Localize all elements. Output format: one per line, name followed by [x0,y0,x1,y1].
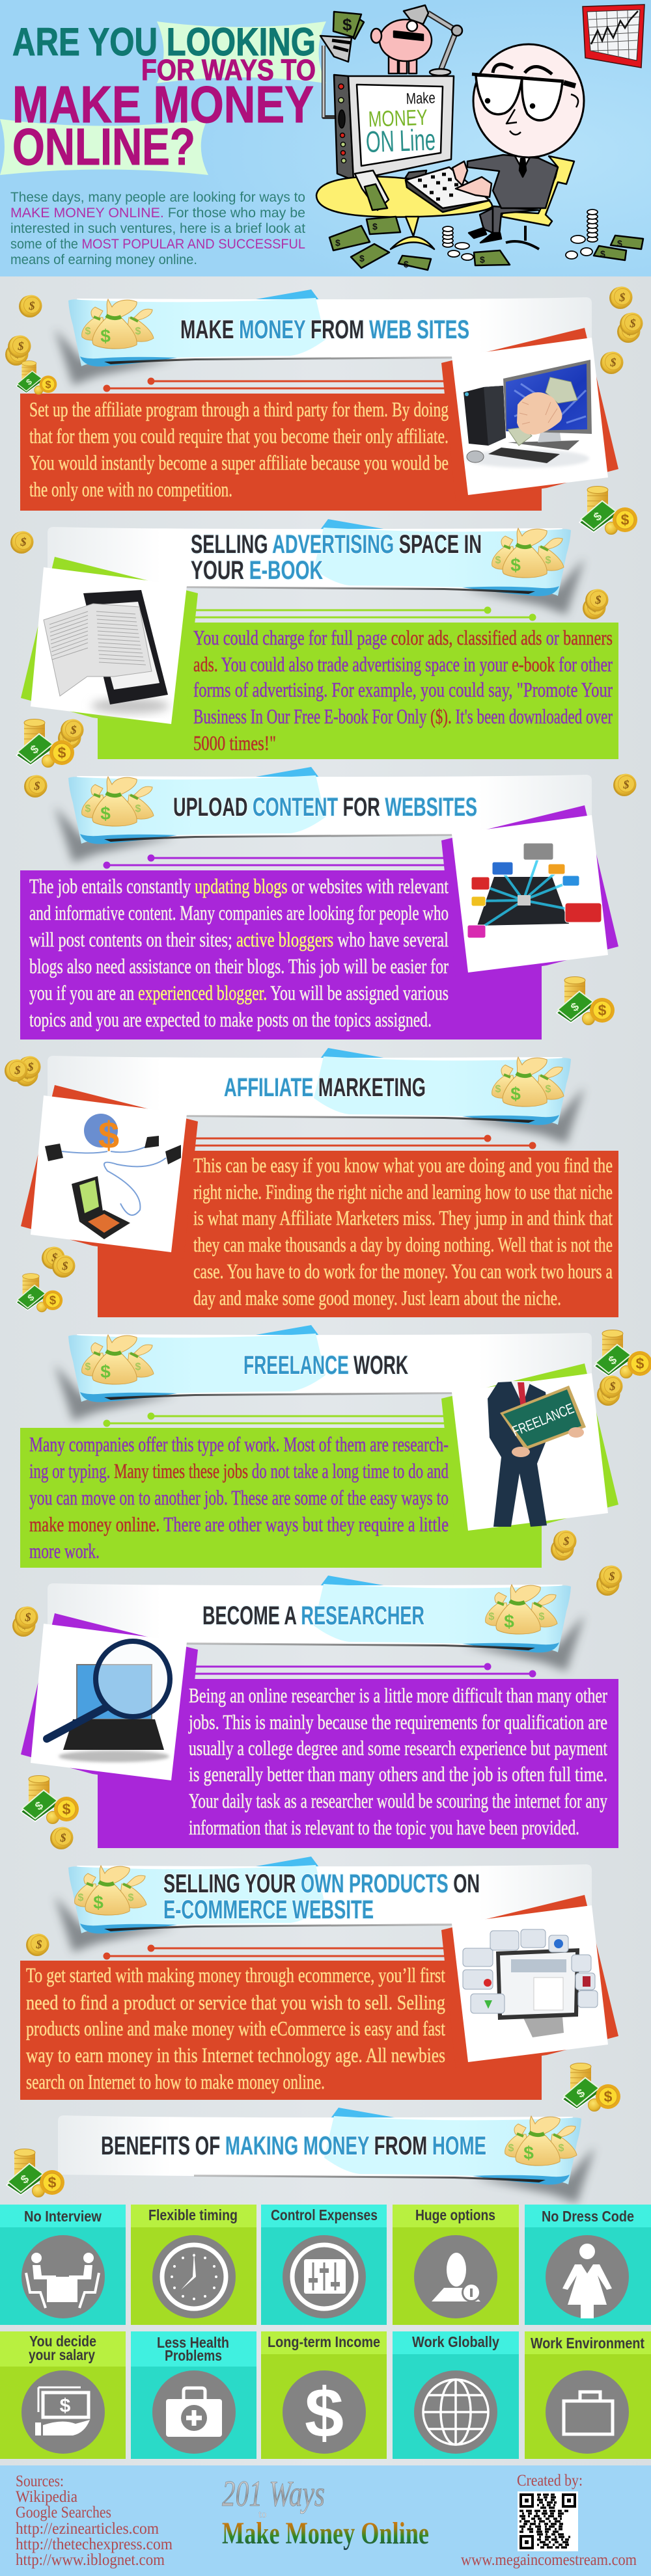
connector lines [104,378,449,392]
money bags [492,528,564,578]
body text: You would instantly become a super affiliate because you would be [29,451,449,474]
ribbon [48,519,585,615]
body text [188,1684,607,1839]
body text: To get started with making money through ecommerce, you’ll first [26,1963,445,1987]
card: control expenses [261,2205,387,2325]
illustration: piggy bank and lamp arm [371,5,462,75]
text panel [20,870,542,1040]
money bags [75,1866,146,1915]
illustration: scattered cash and coins: $ [617,238,622,248]
back card [441,328,618,501]
title [12,20,316,176]
section 1: make money from web sites [20,289,618,511]
intro paragraph: These days, many people are looking for ways to [10,190,305,205]
card: no interview [0,2205,126,2325]
image card: computer with fist [452,338,608,495]
text panel [20,1961,542,2100]
back card [21,557,198,731]
illustration: scattered cash and coins: $ [404,259,409,269]
image card: phone and book [31,567,187,724]
intro paragraph: some of the MOST POPULAR AND SUCCESSFUL [10,237,305,252]
image card: tablet with app icons [452,815,608,973]
heading: SELLING YOUR OWN PRODUCTS ON [163,1870,480,1898]
sources: Google Searches [16,2504,111,2521]
sources [16,2473,173,2569]
card: you decide your salary: $ [60,2395,71,2417]
sources: http://ezinearticles.com [16,2520,159,2538]
money bags [82,299,154,349]
section 7: selling your own products [20,1857,618,2100]
heading [191,530,482,585]
image card: man with freelance board: FREELANCE [510,1400,576,1440]
text panel [20,394,542,511]
card: long-term income: $ [305,2373,344,2452]
ribbon [55,289,592,385]
heading: AFFILIATE MARKETING [224,1073,426,1102]
intro paragraph: means of earning money online. [10,252,197,267]
card: you decide your salary [0,2331,126,2459]
body text: and informative content. Many companies are looking for people who [29,901,449,924]
image card: monitor with web icons [452,1905,608,2062]
card: long-term income [261,2331,387,2459]
section 4: affiliate marketing [21,1048,618,1317]
money bags [492,1057,564,1107]
body text: 5000 times!" [193,731,276,755]
money bags [82,777,154,826]
body text: that for them you could require that you become their only affiliate. [29,424,449,448]
201 ways logo: Make Money Online [222,2516,429,2551]
card: no interview: No Interview [24,2208,102,2225]
screen text: Make [406,89,436,108]
intro paragraph [10,190,305,267]
title: ARE YOU LOOKING [12,20,316,64]
card: flexible timing [131,2205,256,2325]
body text: you can move on to another job. These are some of the easy ways to [29,1486,449,1509]
card: huge options [393,2205,519,2325]
body text [193,1153,613,1309]
illustration: scattered cash and coins: $ [335,237,340,248]
sources: http://www.iblognet.com [16,2551,165,2569]
body text [29,874,449,1031]
back card [21,1613,198,1787]
money bags [486,1585,557,1634]
text panel [98,623,618,759]
back card [441,1895,618,2068]
illustration: scattered cash and coins: $ [600,248,605,259]
card: work globally: Work Globally [412,2333,499,2350]
body text: you if you are an experienced blogger. You will be assigned various [29,981,449,1004]
section 8: benefits banner [58,2108,595,2203]
body text [193,626,613,755]
back card [21,1085,198,1259]
body text [29,397,449,501]
card: flexible timing: Flexible timing [148,2207,238,2223]
ribbon [48,1048,585,1144]
ribbon [48,1576,585,1671]
created by: Created by: [517,2472,583,2489]
heading: MAKE MONEY FROM WEB SITES [180,315,469,344]
image card: man with freelance board [452,1373,608,1531]
image card: globe and laptops: $ [98,1114,119,1157]
title: MAKE MONEY [12,75,314,133]
body text: products online and make money with eCommerce is easy and fast [26,2017,445,2040]
section 5: freelance work [20,1325,618,1568]
money bags [505,2116,577,2166]
footer panel [0,2465,651,2576]
highlight shape behind title [0,21,326,175]
body text: Set up the affiliate program through a third party for them. By doing [29,397,449,421]
connector lines [191,607,536,621]
section 6: become a researcher [21,1576,618,1848]
section 3: upload content [20,767,618,1040]
heading: FREELANCE WORK [243,1351,408,1380]
QR code [518,2491,578,2551]
intro paragraph: MAKE MONEY ONLINE. For those who may be [10,206,305,221]
ribbon [55,1325,592,1421]
ribbon [55,1857,592,1952]
card: control expenses: Control Expenses [271,2207,378,2223]
body text: ads. You could also trade advertising space in your e-book for other [193,652,613,676]
text panel [98,1679,618,1848]
card: less health problems [131,2331,256,2459]
card: work environment [525,2331,651,2459]
head [473,44,584,157]
connector lines [191,1663,536,1677]
ribbon [58,2108,595,2203]
illustration: scattered cash and coins [329,209,643,270]
body text: will post contents on their sites; active bloggers who have several [29,928,449,951]
section 2: selling advertising space [21,519,618,759]
back card [441,805,618,978]
screen text: MONEY [368,105,428,132]
sources: Wikipedia [16,2488,77,2506]
body text: make money online. There are other ways but they require a little [29,1512,449,1536]
title: FOR WAYS TO [141,53,316,87]
decorative coins and cash [5,286,651,2197]
heading: BECOME A RESEARCHER [202,1602,424,1630]
card: you decide your salary: your salary [29,2346,95,2363]
connector lines [191,1135,536,1149]
heading: UPLOAD CONTENT FOR WEBSITES [173,793,477,822]
body text: blogs also need assistance on their blogs. This job will be easier for [29,954,449,978]
illustration: desk and keyboard [316,167,492,249]
heading: YOUR E-BOOK [191,556,323,585]
text panel [98,1151,618,1317]
text panel [20,1428,542,1568]
body text: need to find a product or service that you wish to sell. Selling [26,1991,445,2014]
sources: Sources: [16,2473,64,2490]
body text: Many companies offer this type of work. Most of them are research- [29,1432,449,1456]
connector lines [104,1945,449,1959]
body text: topics and you are expected to make posts on the topics assigned. [29,1008,432,1031]
image card: globe and laptops [31,1095,187,1252]
card: long-term income: Long-term Income [268,2333,380,2350]
body text: way to earn money in this Internet technology age. All newbies [26,2043,445,2067]
card: no dress code: No Dress Code [542,2208,634,2225]
body text: You could charge for full page color ads, classified ads or banners [193,626,613,649]
heading: E-COMMERCE WEBSITE [163,1896,374,1924]
screen text: ON Line [365,122,436,159]
body text: ing or typing. Many times these jobs do not take a long time to do and [29,1459,449,1483]
back card [441,1363,618,1536]
money bags [82,1335,154,1384]
card: you decide your salary: You decide [29,2333,96,2350]
illustration: robot arm with cash: $ [342,15,352,34]
sources: http://thetechexpress.com [16,2536,173,2553]
body text: more work. [29,1539,100,1563]
card: no dress code [525,2205,651,2325]
image card: magnifier on laptop [31,1624,187,1780]
body text [26,1963,445,2093]
illustration: scattered cash and coins: $ [372,221,378,232]
header panel [0,0,651,276]
illustration: man in suit [452,44,584,249]
201 ways logo: to [258,2509,266,2520]
title: ONLINE? [12,118,195,176]
benefits grid [0,2205,651,2459]
card: huge options: Huge options [415,2207,495,2223]
body text: search on Internet to how to make money online. [26,2070,325,2093]
illustration: scattered cash and coins: $ [480,254,485,265]
illustration: robot arm with cash [320,12,364,117]
card: work globally [393,2331,519,2459]
body text: the only one with no competition. [29,477,232,501]
heading: SELLING ADVERTISING SPACE IN [191,530,482,559]
intro paragraph: interested in such ventures, here is a brief look at [10,221,305,236]
body text [29,1432,449,1563]
heading [163,1870,480,1924]
body text: The job entails constantly updating blogs or websites with relevant [29,874,449,898]
connector lines [104,855,449,868]
201 ways logo [222,2474,429,2551]
illustration: chart on wall [583,5,644,68]
card: less health problems: Less Health [157,2334,229,2351]
illustration: scattered cash and coins: $ [359,253,365,263]
card: less health problems: Problems [165,2347,222,2364]
illustration: computer monitor [334,75,454,180]
ribbon [55,767,592,863]
201 ways logo: 201 Ways [222,2474,325,2514]
screen text [364,89,437,159]
connector lines [104,1413,449,1427]
heading: BENEFITS OF MAKING MONEY FROM HOME [101,2132,486,2160]
